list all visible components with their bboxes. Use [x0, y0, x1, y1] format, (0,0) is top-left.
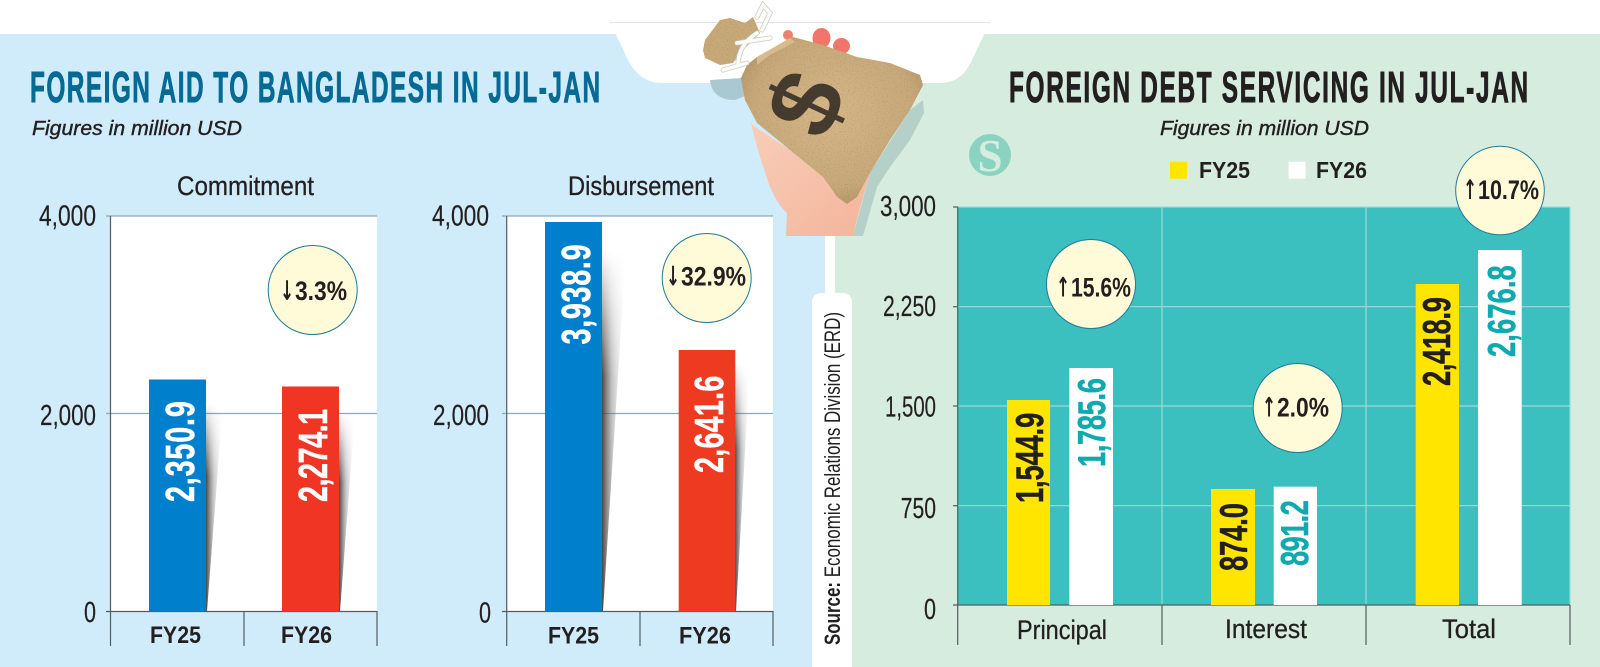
- y-axis labels: 3,000: [880, 191, 936, 223]
- callout: up 15.6%: 15.6%: [1071, 273, 1131, 303]
- heading: foreign aid: FOREIGN AID TO BANGLADESH IN JUL-JAN: [30, 64, 600, 112]
- logo: TBS monogram: [969, 131, 1011, 181]
- bar shadow: [206, 406, 220, 611]
- callout: down 3.3%: ↓: [280, 276, 294, 307]
- y-axis labels: 0: [924, 594, 936, 626]
- dollar sign on bag: $: [744, 55, 869, 153]
- value: 3,938.9: 3,938.9: [554, 244, 599, 344]
- y-axis labels: 2,000: [433, 400, 489, 432]
- value: 2,274.1: 2,274.1: [291, 409, 336, 502]
- icon: hand holding money bag: [703, 5, 924, 236]
- callout: up 2.0%: [1253, 364, 1342, 452]
- bar shadow: [735, 368, 747, 611]
- callout: up 15.6%: [1046, 240, 1136, 328]
- legend: [1170, 157, 1367, 183]
- subtitle: foreign aid units: Figures in million USD: [32, 118, 242, 140]
- bar: FY25 disbursement: [545, 222, 602, 612]
- bar shadow: [339, 416, 352, 611]
- bars: interest: 874.0: [1213, 503, 1256, 571]
- bars: interest: 891.2: [1274, 500, 1317, 566]
- value: 2,641.6: 2,641.6: [687, 376, 732, 473]
- callout: up 2.0%: 2.0%: [1277, 393, 1329, 423]
- source strip: [812, 230, 852, 667]
- bars: principal: 1,785.6: [1071, 378, 1114, 467]
- category label: FY26: FY26: [679, 622, 731, 650]
- bars: total: 2,418.9: [1416, 297, 1459, 386]
- callout: down 3.3%: [268, 246, 357, 334]
- callout: up 15.6%: ↑: [1056, 273, 1070, 304]
- callout: up 10.7%: ↑: [1463, 175, 1477, 206]
- callout: up 2.0%: ↑: [1262, 393, 1276, 424]
- y-axis labels: 750: [901, 493, 936, 525]
- bars: principal: 1,544.9: [1009, 413, 1052, 503]
- y-axis labels: 4,000: [432, 200, 489, 232]
- category label: interest: Interest: [1225, 614, 1307, 644]
- chart: disbursement: [432, 171, 773, 650]
- bar: FY25 commitment: [149, 380, 206, 612]
- y-axis labels: 0: [84, 597, 96, 629]
- callout: up 10.7%: 10.7%: [1478, 175, 1539, 205]
- category label: FY25: FY25: [150, 622, 201, 649]
- bar: FY26 commitment: [282, 386, 339, 612]
- y-axis labels: 2,250: [883, 291, 936, 323]
- legend: FY26: [1316, 157, 1367, 183]
- panel: foreign aid background: [0, 34, 825, 667]
- y-axis labels: [880, 191, 936, 626]
- y-axis labels: 2,000: [40, 400, 96, 432]
- bars: total: [1416, 250, 1524, 605]
- bars: interest: [1211, 487, 1317, 605]
- subtitle: debt units: Figures in million USD: [1160, 118, 1369, 140]
- bars: total: 2,676.8: [1481, 265, 1524, 357]
- callout: down 32.9%: 32.9%: [681, 262, 746, 292]
- y-axis labels: 0: [479, 598, 491, 630]
- panel: debt servicing background: [835, 34, 1600, 667]
- chart: commitment: [39, 171, 377, 649]
- heading: debt servicing: FOREIGN DEBT SERVICING IN JUL-JAN: [1009, 64, 1528, 112]
- category label: total: Total: [1442, 614, 1496, 644]
- y-axis labels: [432, 200, 491, 630]
- category label: FY26: FY26: [281, 622, 332, 649]
- source text: Source: Economic Relations Division (ERD): [820, 312, 845, 645]
- logo: TBS monogram: S: [977, 131, 1003, 181]
- y-axis labels: 4,000: [39, 200, 96, 232]
- chart title: commitment: Commitment: [177, 171, 314, 201]
- category label: FY25: FY25: [548, 622, 599, 650]
- y-axis labels: [39, 200, 96, 629]
- callout: down 32.9%: ↓: [666, 262, 680, 293]
- top notch: [610, 22, 990, 83]
- bars: principal: [1007, 368, 1114, 605]
- legend: FY25: [1199, 157, 1250, 183]
- bar: FY26 disbursement: [679, 350, 735, 612]
- chart title: disbursement: Disbursement: [568, 171, 714, 201]
- value: 2,350.9: 2,350.9: [158, 401, 203, 502]
- chart: foreign debt servicing: [880, 146, 1570, 645]
- callout: up 10.7%: [1456, 146, 1544, 235]
- category label: principal: Principal: [1017, 615, 1107, 645]
- callout: down 32.9%: [662, 234, 751, 322]
- bar shadow: [602, 256, 622, 611]
- callout: down 3.3%: 3.3%: [295, 276, 347, 306]
- y-axis labels: 1,500: [885, 392, 936, 424]
